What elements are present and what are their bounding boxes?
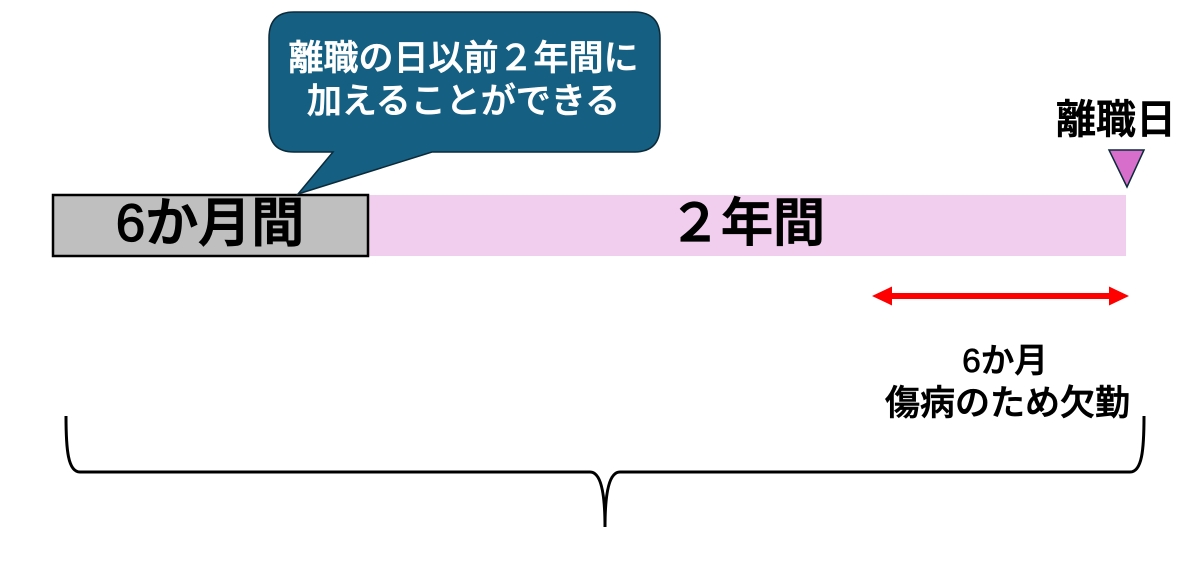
callout: 加えることができる bbox=[307, 82, 620, 121]
arrow: 6 month span bbox=[872, 286, 1129, 306]
icon: triangle marker bbox=[1109, 150, 1144, 187]
pink bar: 2 years: ２年間 bbox=[669, 195, 825, 253]
callout bbox=[269, 12, 660, 194]
brace bbox=[66, 416, 1144, 527]
pink bar: 2 years bbox=[369, 195, 1126, 256]
text: 6 months sick leave: 6か月 bbox=[962, 343, 1048, 380]
text: 6 months sick leave: 傷病のため欠勤 bbox=[885, 384, 1130, 423]
callout: 離職の日以前２年間に bbox=[288, 39, 639, 78]
gray bar: 6 months bbox=[53, 194, 368, 256]
text: 6 months sick leave bbox=[885, 343, 1130, 423]
label: departure date: 離職日 bbox=[1056, 98, 1176, 142]
gray bar: 6 months: 6か月間 bbox=[116, 194, 304, 253]
